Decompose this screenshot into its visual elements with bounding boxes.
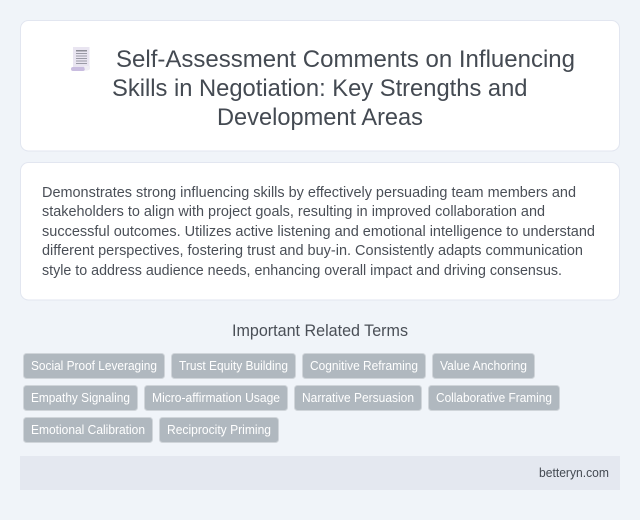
tag: Cognitive Reframing — [302, 354, 426, 378]
tag: Reciprocity Priming — [160, 418, 278, 442]
tag group: related terms — [24, 354, 560, 442]
text block: description: Demonstrates strong influencing skills by effectively persuading team members and — [42, 184, 576, 201]
tag: Collaborative Framing: Collaborative Framing — [436, 391, 552, 405]
tag: Reciprocity Priming: Reciprocity Priming — [167, 423, 271, 437]
tag: Trust Equity Building: Trust Equity Building — [179, 359, 288, 373]
title — [112, 46, 575, 131]
title: Development Areas — [217, 104, 423, 131]
panel: title card — [20, 20, 620, 151]
tag: Trust Equity Building — [172, 354, 296, 378]
tag: Social Proof Leveraging: Social Proof Leveraging — [31, 359, 157, 373]
text block: description: stakeholders to align with project goals, resulting in improved collaboration and — [42, 203, 545, 220]
tag: Value Anchoring — [432, 354, 534, 378]
tag: Collaborative Framing — [428, 386, 560, 410]
tag: Micro-affirmation Usage: Micro-affirmation Usage — [152, 391, 280, 405]
text block: description — [42, 184, 595, 279]
footer — [20, 456, 620, 490]
text block: description: successful outcomes. Utilizes active listening and emotional intelligence to understand — [42, 223, 595, 240]
tag: Value Anchoring: Value Anchoring — [440, 359, 527, 373]
tag: Empathy Signaling — [24, 386, 138, 410]
panel: self-assessment description — [20, 162, 620, 300]
text block: description: different perspectives, fostering trust and buy-in. Consistently adapts communication — [42, 242, 583, 259]
tag: Cognitive Reframing: Cognitive Reframing — [310, 359, 418, 373]
tag: Narrative Persuasion: Narrative Persuasion — [302, 391, 414, 405]
tag: Micro-affirmation Usage — [144, 386, 288, 410]
tag: Narrative Persuasion — [294, 386, 422, 410]
text block: description: style to address audience needs, enhancing overall impact and driving consensus. — [42, 262, 562, 279]
tag: Emotional Calibration — [24, 418, 152, 442]
title: Self-Assessment Comments on Influencing — [116, 46, 575, 73]
icon: document scroll — [71, 47, 90, 71]
tag: Emotional Calibration: Emotional Calibration — [31, 423, 145, 437]
title: Skills in Negotiation: Key Strengths and — [112, 75, 528, 102]
tag: Empathy Signaling: Empathy Signaling — [31, 391, 130, 405]
heading: important related terms: Important Related Terms — [232, 322, 408, 340]
footer: betteryn.com — [539, 466, 609, 480]
tag: Social Proof Leveraging — [24, 354, 164, 378]
